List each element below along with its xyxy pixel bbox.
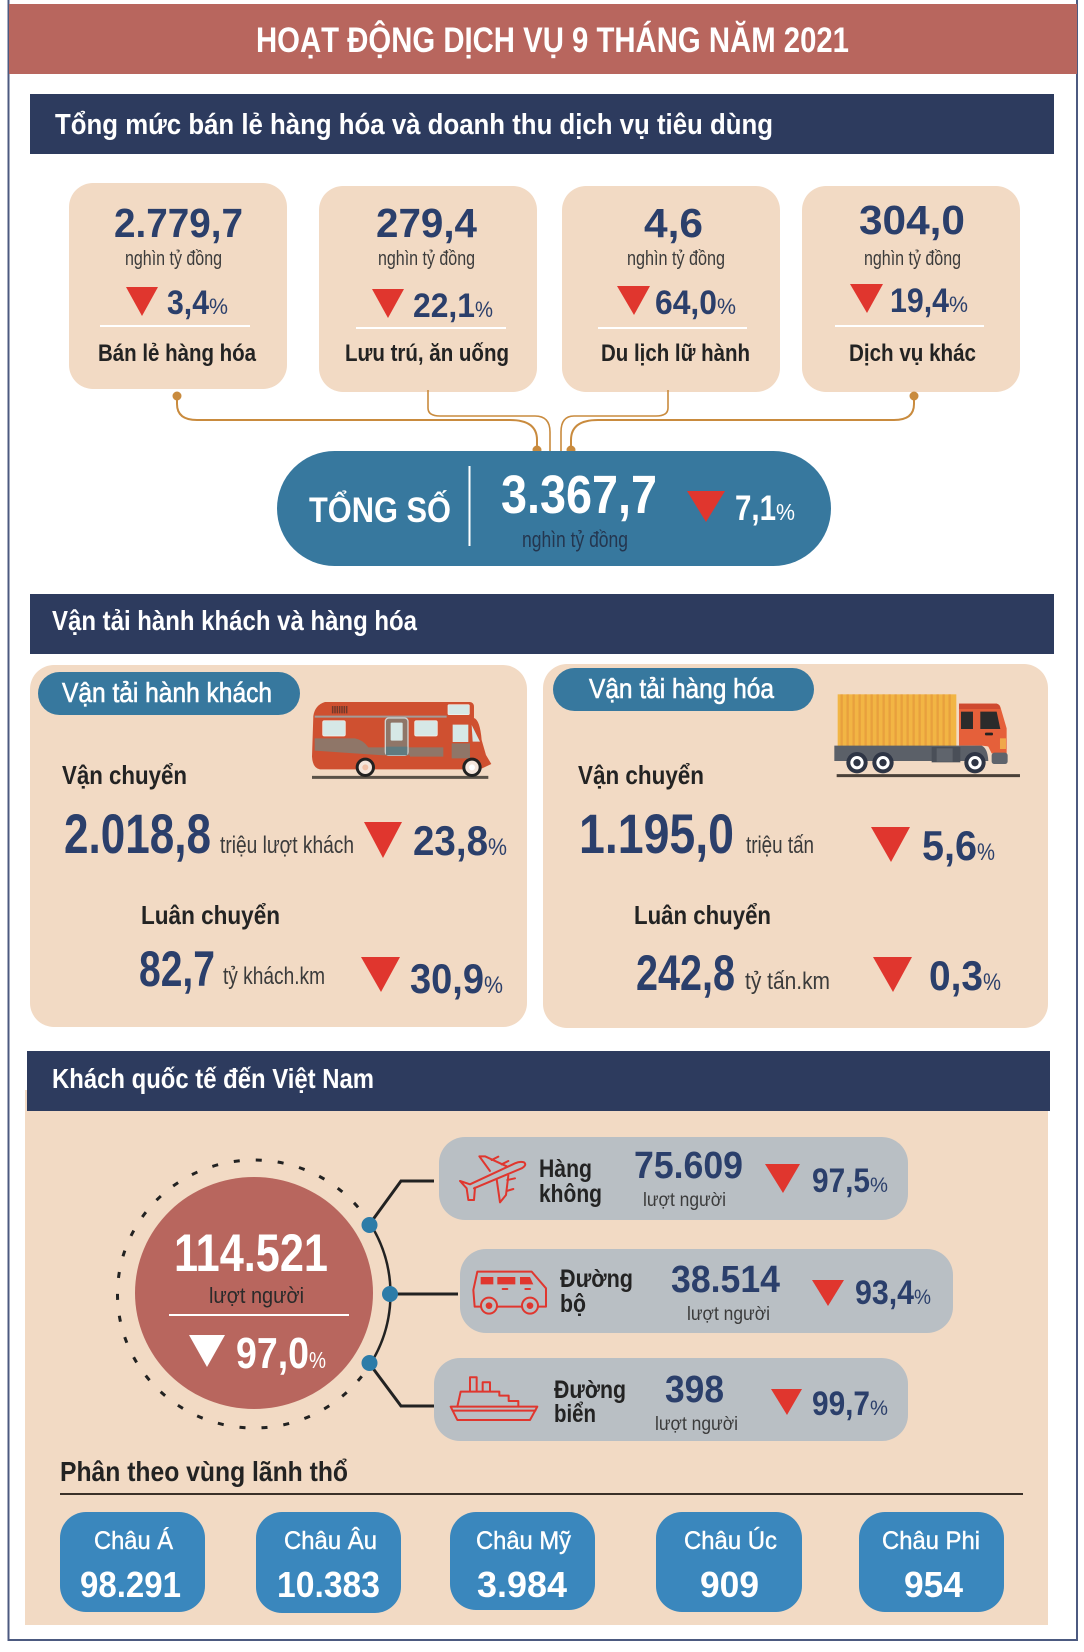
- card: other services: 19,4: [890, 282, 949, 320]
- icon: ship: [451, 1377, 537, 1420]
- row: sea: 99,7: [812, 1385, 870, 1423]
- panel: passenger transport: Luân chuyển: [141, 900, 280, 930]
- panel: freight transport: 1.195,0: [579, 802, 734, 865]
- card: other services: nghìn tỷ đồng: [864, 248, 961, 270]
- total visitors circle: [117, 1160, 390, 1428]
- section heading: retail: [30, 94, 1054, 154]
- card: travel: %: [717, 294, 736, 319]
- panel: freight transport: %: [977, 839, 995, 866]
- panel: passenger transport: %: [488, 834, 507, 861]
- total pill: nghìn tỷ đồng: [522, 527, 628, 552]
- row: road: %: [914, 1286, 931, 1309]
- total visitors circle: %: [309, 1347, 326, 1373]
- row: sea: lượt người: [655, 1414, 738, 1435]
- row: air: không: [539, 1180, 602, 1208]
- icon: camper bus: [312, 702, 491, 777]
- title banner: [9, 4, 1077, 74]
- panel: passenger transport: Vận chuyển: [62, 760, 187, 790]
- section heading: visitors: [27, 1051, 1050, 1111]
- panel: freight transport: Vận chuyển: [578, 760, 704, 790]
- card: travel: Du lịch lữ hành: [601, 340, 750, 367]
- icon: plane: [460, 1156, 525, 1202]
- panel: freight transport: Vận tải hàng hóa: [589, 673, 774, 704]
- row: road: Đường: [560, 1265, 633, 1293]
- row: road: lượt người: [687, 1304, 770, 1325]
- row: sea: [434, 1358, 908, 1441]
- card: accommodation and catering: %: [475, 297, 493, 322]
- card: Asia: 98.291: [80, 1564, 181, 1605]
- card: Americas: Châu Mỹ: [476, 1527, 571, 1555]
- card: Africa: 954: [904, 1564, 963, 1605]
- section heading: visitors: Khách quốc tế đến Việt Nam: [52, 1063, 374, 1094]
- panel: international visitors: [25, 1051, 1050, 1625]
- total visitors circle: 97,0: [236, 1329, 309, 1378]
- total visitors circle: lượt người: [209, 1283, 304, 1308]
- title: HOẠT ĐỘNG DỊCH VỤ 9 THÁNG NĂM 2021: [256, 20, 849, 60]
- row: road: bộ: [560, 1290, 586, 1318]
- card: Australia: 909: [700, 1564, 759, 1605]
- row: air: 97,5: [812, 1162, 870, 1200]
- connectors to total: [174, 390, 918, 454]
- icon: van: [473, 1272, 546, 1314]
- connector lines: [362, 1181, 458, 1406]
- section heading: transport: Vận tải hành khách và hàng hóa: [52, 605, 417, 636]
- row: air: [439, 1137, 908, 1220]
- row: road: 38.514: [671, 1259, 780, 1301]
- card: travel: [562, 186, 780, 392]
- card: retail goods: 3,4: [167, 284, 209, 322]
- section heading: retail: Tổng mức bán lẻ hàng hóa và doanh thu dịch vụ tiêu dùng: [55, 109, 773, 141]
- card: Europe: [256, 1512, 401, 1613]
- row: road: 93,4: [855, 1274, 914, 1312]
- total pill: 7,1: [735, 489, 776, 528]
- panel: freight transport: [543, 664, 1048, 1028]
- row: air: lượt người: [643, 1190, 726, 1211]
- card: other services: 304,0: [859, 197, 965, 243]
- card: Americas: 3.984: [477, 1564, 567, 1605]
- panel: passenger transport: 2.018,8: [64, 802, 211, 865]
- panel: freight transport: 5,6: [922, 822, 977, 869]
- row: road: [460, 1249, 953, 1333]
- panel: freight transport: triệu tấn: [746, 832, 814, 859]
- row: air: 75.609: [634, 1145, 743, 1187]
- card: retail goods: [69, 183, 287, 389]
- card: Asia: Châu Á: [94, 1526, 173, 1555]
- card: Asia: [60, 1512, 205, 1612]
- row: air: Hàng: [539, 1155, 592, 1183]
- card: retail goods: %: [209, 294, 228, 319]
- card: other services: Dịch vụ khác: [849, 340, 976, 367]
- card: travel: nghìn tỷ đồng: [627, 248, 725, 270]
- card: travel: 4,6: [644, 200, 703, 246]
- total visitors circle: 114.521: [174, 1224, 328, 1283]
- subheading: by region: Phân theo vùng lãnh thổ: [60, 1456, 348, 1487]
- panel: passenger transport: tỷ khách.km: [223, 963, 325, 990]
- section heading: transport: [30, 594, 1054, 654]
- card: Africa: Châu Phi: [882, 1527, 980, 1555]
- row: sea: Đường: [554, 1376, 626, 1404]
- card: accommodation and catering: 22,1: [413, 287, 475, 325]
- card: retail goods: Bán lẻ hàng hóa: [98, 340, 257, 367]
- card: retail goods: 2.779,7: [114, 200, 243, 246]
- row: sea: biển: [554, 1400, 596, 1428]
- card: accommodation and catering: Lưu trú, ăn uống: [345, 340, 509, 367]
- card: Australia: Châu Úc: [684, 1526, 777, 1555]
- card: Europe: Châu Âu: [284, 1526, 377, 1555]
- card: accommodation and catering: 279,4: [376, 200, 477, 246]
- total pill: TỔNG SỐ: [309, 490, 451, 530]
- panel: passenger transport: 23,8: [413, 817, 488, 864]
- card: other services: [802, 186, 1020, 392]
- panel: passenger transport: %: [484, 972, 503, 999]
- card: Africa: [859, 1512, 1004, 1612]
- card: travel: 64,0: [655, 284, 717, 322]
- total pill: [277, 451, 831, 566]
- card: accommodation and catering: nghìn tỷ đồng: [378, 248, 475, 270]
- panel: freight transport: 242,8: [636, 945, 735, 1001]
- panel: passenger transport: 82,7: [139, 941, 215, 997]
- panel: freight transport: Luân chuyển: [634, 900, 771, 930]
- panel: passenger transport: [30, 665, 527, 1027]
- row: air: %: [870, 1174, 888, 1197]
- panel: passenger transport: Vận tải hành khách: [62, 677, 272, 708]
- total pill: 3.367,7: [501, 465, 657, 525]
- panel: freight transport: 0,3: [929, 952, 983, 999]
- panel: freight transport: %: [983, 969, 1001, 996]
- card: other services: %: [949, 292, 968, 317]
- card: retail goods: nghìn tỷ đồng: [125, 248, 222, 270]
- icon: container truck: [834, 694, 1020, 776]
- card: Americas: [450, 1512, 595, 1610]
- row: sea: %: [870, 1397, 888, 1420]
- panel: freight transport: tỷ tấn.km: [745, 968, 830, 995]
- panel: passenger transport: 30,9: [410, 955, 484, 1002]
- panel: passenger transport: triệu lượt khách: [220, 832, 354, 859]
- row: sea: 398: [665, 1369, 724, 1411]
- card: accommodation and catering: [319, 186, 537, 392]
- total pill: %: [776, 499, 795, 525]
- card: Australia: [656, 1512, 802, 1612]
- card: Europe: 10.383: [277, 1564, 380, 1605]
